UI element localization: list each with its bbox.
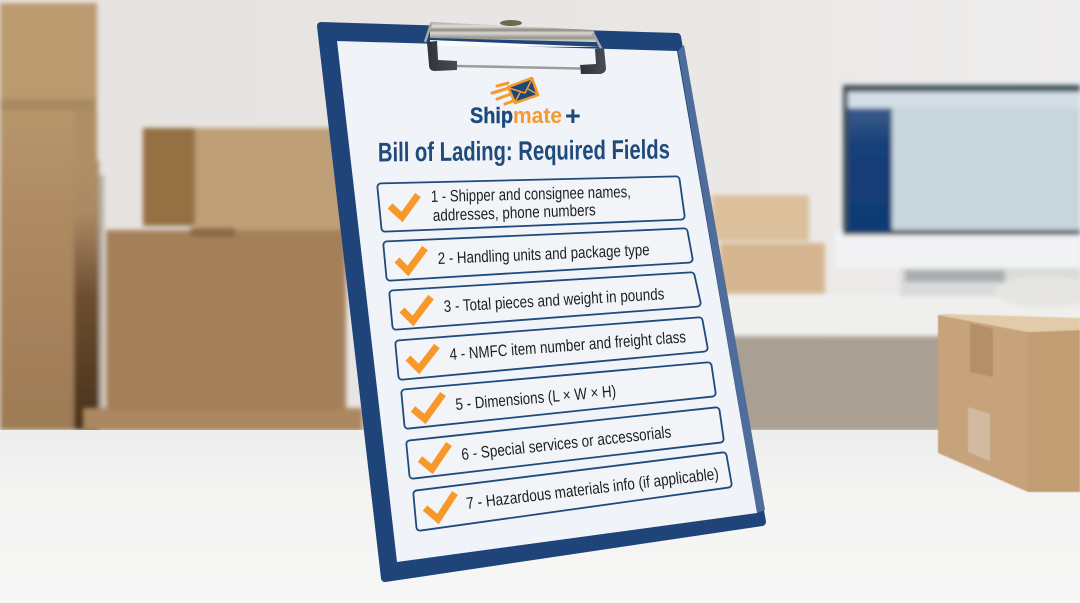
item 6 — [410, 411, 720, 475]
icon: check — [425, 493, 455, 519]
clipboard — [321, 20, 765, 578]
item 6: 6 - Special services or accessorials — [460, 423, 672, 464]
clipboard board — [321, 26, 762, 578]
right shelf boxes — [712, 195, 825, 297]
Shipmate+ logo — [470, 78, 581, 131]
item 1: 1 - Shipper and consignee names, — [431, 183, 631, 206]
item 1 — [381, 180, 681, 228]
item 5 — [405, 366, 712, 425]
item 4 — [399, 321, 704, 376]
right clip clamp — [580, 48, 606, 74]
left stacked cardboard boxes — [0, 3, 104, 430]
item 2: 2 - Handling units and package type — [437, 241, 650, 268]
left clip clamp — [427, 41, 457, 71]
board right edge highlight — [678, 45, 765, 513]
item 3 — [393, 276, 697, 326]
icon: check — [408, 346, 437, 369]
center cardboard boxes — [83, 128, 363, 431]
item 1: addresses, phone numbers — [433, 201, 596, 225]
wordmark: Ship — [470, 103, 513, 128]
icon: check — [402, 297, 431, 321]
metal clip — [425, 20, 606, 74]
item 3: 3 - Total pieces and weight in pounds — [443, 285, 665, 316]
item 4: 4 - NMFC item number and freight class — [449, 328, 687, 364]
Shipmate+ logo: mate — [513, 103, 562, 128]
heading: Bill of Lading: Required Fields — [378, 134, 670, 167]
item 7 — [417, 456, 728, 527]
item 7: 7 - Hazardous materials info (if applicable) — [465, 465, 720, 513]
icon: check — [413, 394, 443, 419]
icon: check — [397, 248, 425, 271]
desk surface — [0, 430, 1080, 603]
icon: check — [390, 195, 418, 217]
icon: flying envelope — [492, 78, 538, 104]
blurred monitor — [835, 85, 1080, 308]
Shipmate+ logo: + — [565, 101, 581, 131]
paper sheet — [337, 41, 757, 562]
cardboard box on desk — [938, 314, 1080, 492]
item 5: 5 - Dimensions (L × W × H) — [455, 383, 617, 414]
desk shelf — [725, 294, 1080, 431]
icon: check — [420, 444, 449, 469]
item 2 — [387, 232, 689, 277]
